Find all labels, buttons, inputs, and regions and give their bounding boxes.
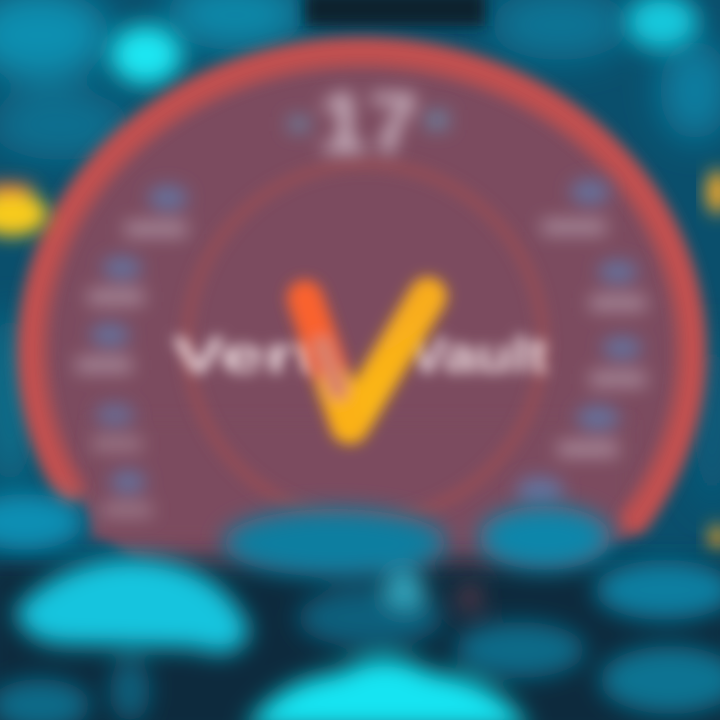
dark base: [0, 560, 720, 720]
center wordmark: Vault: [408, 327, 548, 383]
cloud: far right: [595, 560, 720, 620]
right scale labels: [516, 179, 646, 504]
outer red arc: [32, 52, 692, 520]
cloud: right: [479, 506, 611, 570]
cloud: large left cyan: [15, 558, 250, 654]
cloud: bottom centre cyan: [245, 658, 530, 720]
cloud: lower mid: [298, 588, 442, 648]
gauge top number: 17: [318, 76, 418, 170]
gauge top number: [288, 76, 449, 170]
center wordmark: Vert: [172, 327, 323, 383]
center wordmark: [172, 327, 548, 383]
cloud: left shoulder: [0, 494, 83, 550]
center V logo: [305, 296, 428, 425]
right yellow accent: [706, 170, 720, 552]
left yellow accent: [0, 182, 48, 236]
top dark notch: [305, 0, 485, 26]
gauge: [32, 52, 692, 650]
glowing cyan dots: [110, 0, 698, 85]
small glint: [385, 572, 425, 608]
left scale labels: [76, 185, 188, 516]
bottom clouds: [0, 494, 720, 720]
gauge disc: [37, 54, 687, 650]
cloud: centre: [223, 509, 447, 577]
inner ring: [187, 164, 543, 520]
